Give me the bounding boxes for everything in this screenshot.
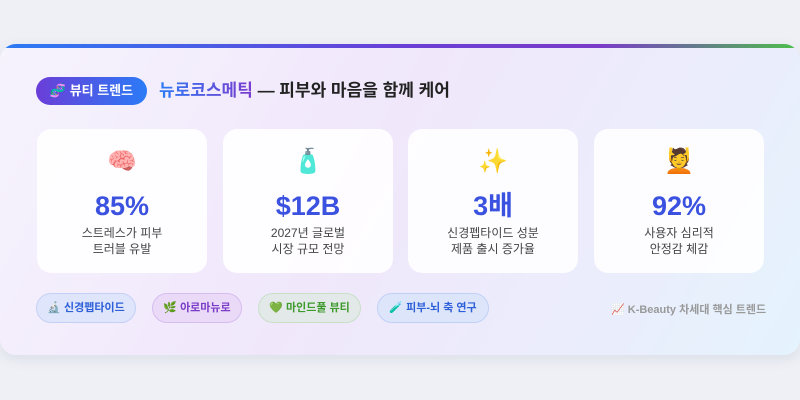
stat: 3배: 3배 [473, 191, 513, 221]
stat: 85%: 🧠 [107, 148, 137, 175]
tag: aroma [152, 293, 242, 323]
stat: 85%: 85% [95, 191, 149, 221]
stat: 3배: 신경펩타이드 성분 [447, 226, 539, 240]
title: 뉴로코스메틱 — 피부와 마음을 함께 케어 [159, 81, 450, 100]
stat: 3배: ✨ [478, 148, 508, 175]
stat: $12B: 🧴 [293, 148, 323, 175]
badge: beauty trend: 🧬 뷰티 트렌드 [50, 83, 133, 98]
stat: 85% [37, 129, 207, 273]
stat: 92%: 사용자 심리적 [644, 226, 714, 240]
tag: neuropeptide: 🔬 신경펩타이드 [47, 302, 125, 314]
tag: neuropeptide [36, 293, 136, 323]
badge: beauty trend [36, 77, 147, 105]
stat: 85%: 스트레스가 피부 [82, 226, 162, 240]
stat: 3배: 제품 출시 증가율 [451, 242, 535, 256]
stat: 92%: 92% [652, 191, 706, 221]
tag: skin-brain [377, 293, 489, 323]
stat: 92% [594, 129, 764, 273]
stat: $12B: 2027년 글로벌 [271, 226, 345, 240]
stat: 85%: 트러블 유발 [93, 242, 151, 256]
tag: skin-brain: 🧪 피부-뇌 축 연구 [389, 302, 477, 314]
stat: 3배 [408, 129, 578, 273]
footer note: 📈 K-Beauty 차세대 핵심 트렌드 [611, 304, 766, 316]
main card [0, 44, 800, 355]
stat: $12B: 시장 규모 전망 [272, 242, 344, 256]
tag: aroma: 🌿 아로마뉴로 [163, 302, 231, 314]
stat: $12B: $12B [276, 191, 340, 221]
stat: 92%: 안정감 체감 [650, 242, 708, 256]
tag: mindful [258, 293, 361, 323]
tag: mindful: 💚 마인드풀 뷰티 [269, 302, 350, 314]
stat: $12B [223, 129, 393, 273]
stat: 92%: 💆 [664, 148, 694, 175]
